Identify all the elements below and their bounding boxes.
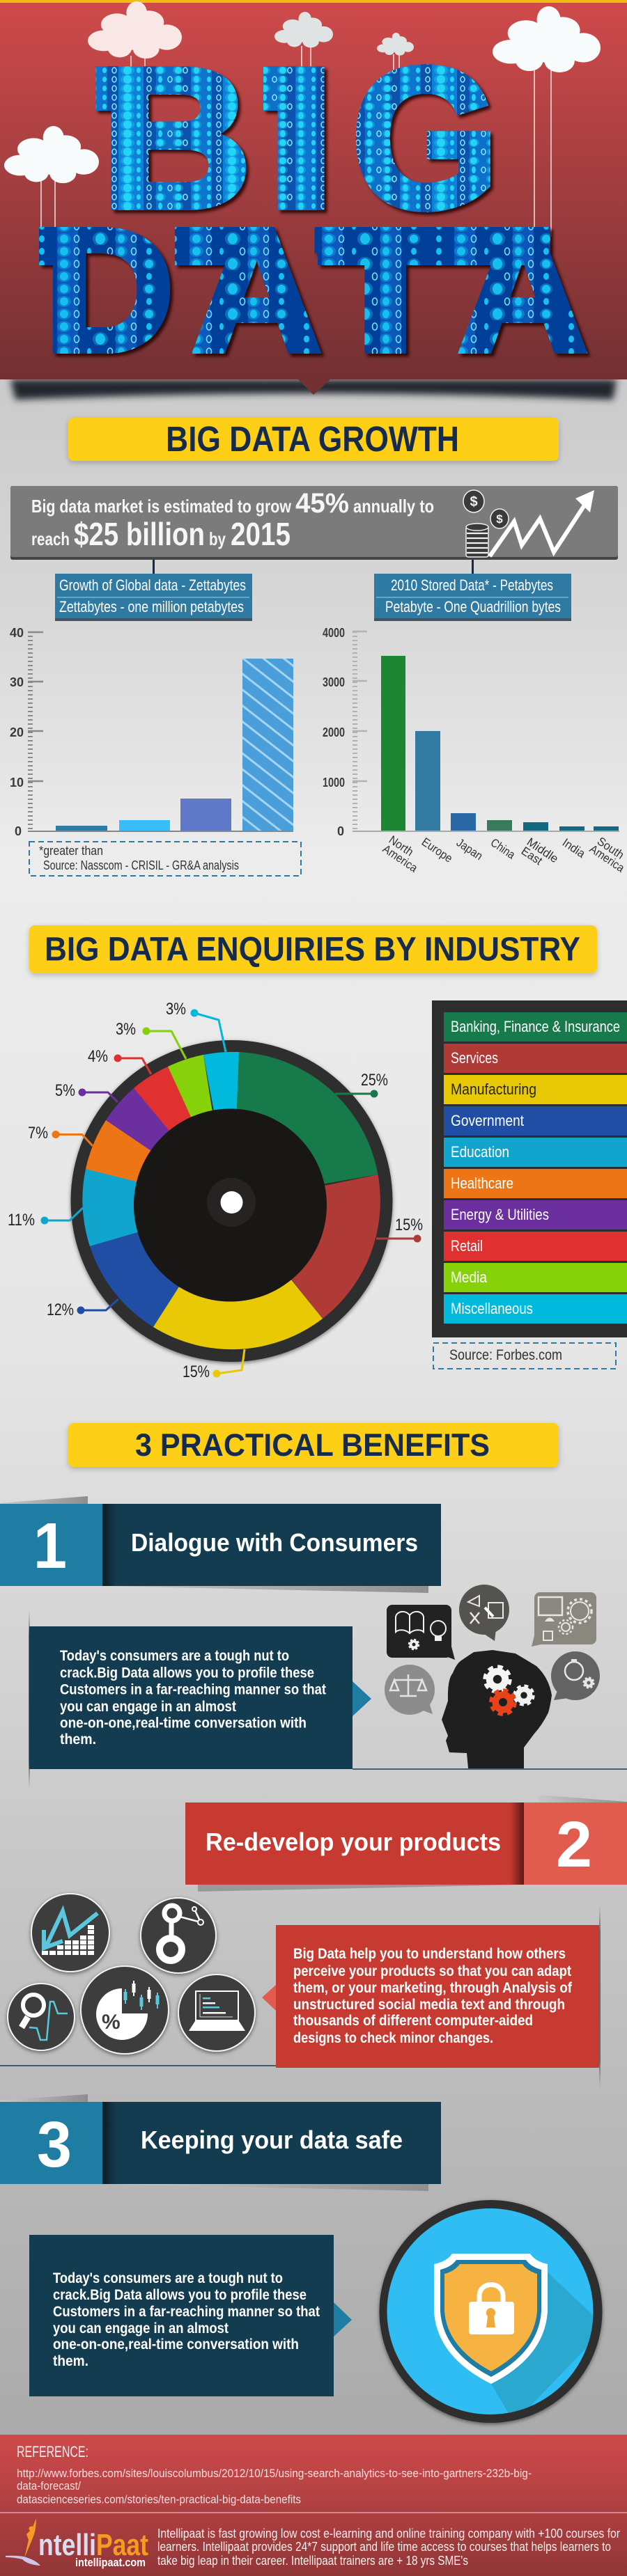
footer: references: http://www.forbes.com/sites/louiscolumbus/2012/10/15/using-search-analytics-to-see-into-gartners-232b-big- xyxy=(17,2467,532,2480)
leader lines and percentage labels: 12% xyxy=(47,1301,74,1319)
banner: benefit 1 xyxy=(0,1496,441,1593)
big data title letters: B xyxy=(101,26,252,249)
panel: benefit 1 text: one-on-one,real-time conversation with xyxy=(60,1715,307,1731)
leader lines and percentage labels: 3% xyxy=(166,1000,186,1019)
big data title letters: D xyxy=(45,193,174,387)
panel: benefit 2 text: designs to check minor changes. xyxy=(293,2030,493,2046)
icon: coins and rising arrow xyxy=(463,490,594,557)
region axis labels: Middle xyxy=(525,835,561,865)
icon: network circle xyxy=(141,1898,216,1973)
big data title letters: T xyxy=(316,193,454,387)
icon: laptop circle xyxy=(178,1974,255,2051)
icon: magnifier circle xyxy=(8,1984,75,2050)
heading: 3 practical benefits xyxy=(68,1423,559,1467)
bar chart: global data: 10 xyxy=(10,776,24,790)
icon: coins and rising arrow: $ xyxy=(496,512,503,526)
banner: benefit 3: Keeping your data safe xyxy=(141,2126,403,2154)
panel: benefit 3 text: Today's consumers are a tough nut to xyxy=(53,2270,283,2286)
speech bubble: scales xyxy=(385,1665,435,1715)
panel: industry legend: Healthcare xyxy=(451,1175,513,1192)
panel: growth of global data caption: Zettabytes - one million petabytes xyxy=(59,598,244,615)
region axis labels: East xyxy=(519,845,545,867)
region axis labels: Japan xyxy=(454,836,485,863)
icon: clouds xyxy=(4,1,601,183)
bar chart: global data: 40 xyxy=(10,626,24,640)
panel: stored data caption xyxy=(374,574,571,621)
company description: take big leap in their career. Intellipaat trainers are + 18 yrs SME's xyxy=(157,2554,468,2568)
market text xyxy=(31,488,434,552)
market text: reach xyxy=(31,528,70,549)
panel: benefit 3 text: crack.Big Data allows you to profile these xyxy=(53,2287,307,2303)
leader lines and percentage labels: 7% xyxy=(28,1124,48,1142)
region axis labels: North xyxy=(387,833,416,859)
banner: benefit 2: Re-develop your products xyxy=(206,1828,501,1856)
leader lines and percentage labels: 15% xyxy=(395,1216,423,1234)
region axis labels xyxy=(380,833,627,875)
market text: 2015 xyxy=(231,516,291,552)
bar chart: global data: 0 xyxy=(15,824,22,838)
icon: security shield xyxy=(379,2200,606,2423)
bar chart: stored data by region xyxy=(323,626,627,875)
icon: pie and candlestick circle: % xyxy=(102,2011,121,2034)
panel: industry legend: Manufacturing xyxy=(451,1081,536,1098)
bar chart: stored data by region: 1000 xyxy=(323,776,345,790)
region axis labels: China xyxy=(488,836,518,862)
panel: benefit 1 text: crack.Big Data allows you to profile these xyxy=(60,1665,314,1681)
market text: $25 billion xyxy=(74,516,205,552)
panel: benefit 2 text: perceive your products so that you can adapt xyxy=(293,1963,571,1979)
icon: analytics circle chart xyxy=(31,1894,109,1972)
market text: Big data market is estimated to grow xyxy=(31,496,292,517)
banner: benefit 2: 2 xyxy=(556,1808,592,1880)
logo: intellipaat: Paat xyxy=(96,2528,148,2562)
bar chart: global data xyxy=(10,626,293,838)
bar chart: global data: 30 xyxy=(10,675,24,689)
panel: stored data caption: Petabyte - One Quadrillion bytes xyxy=(385,598,561,615)
panel: growth of global data caption: Growth of Global data - Zettabytes xyxy=(59,576,246,594)
logo: intellipaat xyxy=(6,2518,148,2569)
footer: references: datascienceseries.com/stories/ten-practical-big-data-benefits xyxy=(17,2492,301,2506)
icon: thinking head with speech bubbles xyxy=(385,1585,600,1768)
leader lines and percentage labels: 15% xyxy=(183,1362,210,1381)
panel: benefit 2 text: unstructured social media text and through xyxy=(293,1997,565,2013)
panel: benefit 1 text: Today's consumers are a tough nut to xyxy=(60,1648,289,1664)
leader lines and percentage labels: 11% xyxy=(8,1211,35,1230)
heading: 3 practical benefits: 3 PRACTICAL BENEFITS xyxy=(135,1427,490,1463)
region axis labels: America xyxy=(380,842,420,875)
donut chart: enquiries xyxy=(8,1000,423,1381)
panel: industry legend: Energy & Utilities xyxy=(451,1206,549,1223)
market text: by xyxy=(209,528,226,549)
panel: benefit 2 text: thousands of different computer-aided xyxy=(293,2013,533,2029)
hero pointer xyxy=(298,379,330,395)
footer: references: data-forecast/ xyxy=(17,2479,81,2492)
big data title letters xyxy=(39,26,587,387)
heading: big data growth xyxy=(68,418,559,461)
big data title letters: G xyxy=(352,26,499,249)
panel: industry legend: Government xyxy=(451,1112,524,1129)
icon: padlock xyxy=(469,2285,514,2334)
source note: greater than xyxy=(29,842,301,876)
panel: market growth banner xyxy=(10,486,618,560)
panel: benefit 3 text: you can engage in an almost xyxy=(53,2320,229,2337)
market text: 45% xyxy=(295,488,349,519)
bar chart: stored data by region: 2000 xyxy=(323,725,345,739)
donut hole xyxy=(134,1108,327,1302)
big data title letters: I xyxy=(265,26,337,249)
footer: references xyxy=(0,2435,627,2576)
panel: benefit 3 text: Customers in a far-reaching manner so that xyxy=(53,2304,320,2320)
panel: industry legend xyxy=(432,1000,627,1337)
panel: benefit 2 text: Big Data help you to understand how others xyxy=(293,1946,566,1962)
company description xyxy=(157,2527,620,2568)
logo: intellipaat: ntelli xyxy=(38,2528,96,2562)
region axis labels: Europe xyxy=(419,835,455,865)
leader lines and percentage labels: 4% xyxy=(88,1047,108,1066)
bar chart: stored data by region: 3000 xyxy=(323,675,345,689)
source note: greater than: *greater than xyxy=(39,844,103,858)
panel: growth of global data caption xyxy=(55,574,252,621)
banner: benefit 3: 3 xyxy=(37,2108,72,2181)
panel: stored data caption: 2010 Stored Data* - Petabytes xyxy=(391,576,553,594)
source note: forbes xyxy=(433,1343,616,1369)
speech bubble: computer and gears xyxy=(532,1592,596,1647)
big data title letters: A xyxy=(192,193,321,387)
leader lines and percentage labels: 25% xyxy=(361,1071,388,1090)
panel: industry legend: Education xyxy=(451,1143,509,1161)
speech bubble: tools xyxy=(459,1585,509,1641)
hero banner xyxy=(0,0,627,400)
panel: benefit 1 text xyxy=(29,1610,627,1789)
panel: benefit 3 text xyxy=(29,2235,352,2396)
panel: benefit 3 text: one-on-one,real-time conversation with xyxy=(53,2337,299,2353)
bar chart: stored data by region: 4000 xyxy=(323,626,345,640)
icon: pie and candlestick circle xyxy=(81,1966,169,2054)
banner: benefit 3 xyxy=(0,2094,441,2191)
logo: intellipaat: intellipaat.com xyxy=(75,2556,146,2569)
region axis labels: South xyxy=(595,835,626,862)
panel: industry legend: Services xyxy=(451,1049,498,1067)
panel: industry legend: Media xyxy=(451,1269,488,1286)
bar chart: global data: 20 xyxy=(10,725,24,739)
big data title letters: A xyxy=(458,193,587,387)
connector lines xyxy=(153,560,472,574)
panel: benefit 1 text: Customers in a far-reaching manner so that xyxy=(60,1682,326,1697)
source note: forbes: Source: Forbes.com xyxy=(449,1347,562,1363)
footer: references: REFERENCE: xyxy=(17,2443,88,2460)
cloud strings xyxy=(41,46,551,237)
region axis labels: India xyxy=(560,836,588,861)
panel: benefit 3 text: them. xyxy=(53,2353,88,2369)
panel: industry legend: Retail xyxy=(451,1237,483,1255)
source note: greater than: Source: Nasscom - CRISIL - GR&A analysis xyxy=(43,858,239,872)
panel: benefit 2 text: them, or your marketing, through Analysis of xyxy=(293,1980,573,1996)
speech bubble: book and bulb xyxy=(387,1605,455,1660)
heading: enquiries by industry: BIG DATA ENQUIRIES BY INDUSTRY xyxy=(45,932,580,968)
panel: benefit 2 text xyxy=(0,1904,601,2089)
banner: benefit 1: Dialogue with Consumers xyxy=(131,1528,418,1557)
banner: benefit 1: 1 xyxy=(33,1509,67,1582)
leader lines and percentage labels xyxy=(8,1000,423,1381)
panel: industry legend: Miscellaneous xyxy=(451,1300,533,1317)
icon: coins and rising arrow: $ xyxy=(470,494,478,510)
leader lines and percentage labels: 3% xyxy=(116,1020,136,1039)
panel: benefit 1 text: them. xyxy=(60,1731,96,1748)
panel: benefit 1 text: you can engage in an almost xyxy=(60,1699,236,1715)
banner: benefit 2 xyxy=(185,1795,627,1892)
speech bubble: stopwatch xyxy=(551,1651,600,1700)
heading: big data growth: BIG DATA GROWTH xyxy=(166,419,459,459)
leader lines and percentage labels: 5% xyxy=(55,1081,75,1100)
bar chart: stored data by region: 0 xyxy=(337,824,344,838)
market text: annually to xyxy=(353,496,434,517)
